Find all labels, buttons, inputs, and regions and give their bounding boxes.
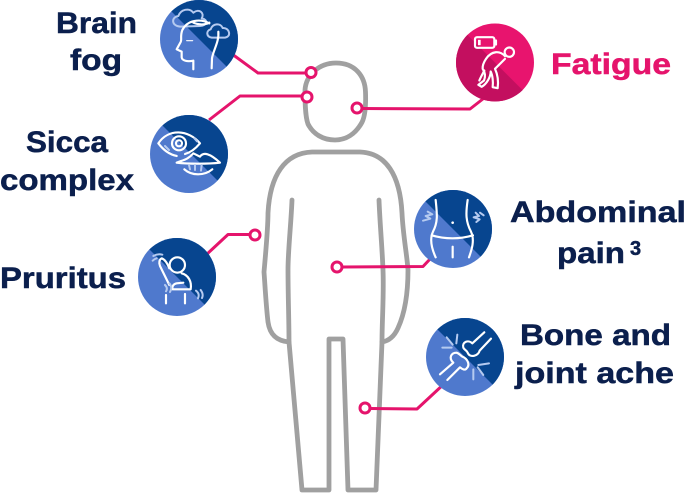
label: bone and joint ache: Bone and [520,319,671,352]
label: abdominal pain: Abdominal [510,196,685,229]
icon: pruritus [138,238,216,316]
icon: fatigue [456,24,534,102]
label: abdominal pain: 3 [630,238,641,260]
icon: sicca complex [150,115,228,193]
connector: bone and joint ache [360,383,445,413]
human body outline [264,63,408,490]
label: sicca complex: complex [0,164,134,197]
connector: sicca complex [209,92,312,120]
icon: brain fog [160,0,238,78]
label: abdominal pain: pain [557,237,625,270]
label: bone and joint ache: joint ache [514,357,674,390]
label: brain fog [56,7,137,77]
label: brain fog: Brain [56,7,137,40]
label: bone and joint ache [514,319,674,390]
label: brain fog: fog [70,44,122,77]
label: abdominal pain [510,196,685,270]
label: fatigue: Fatigue [551,48,671,81]
connector: brain fog [232,54,316,78]
label: sicca complex: Sicca [26,126,108,159]
icon: bone and joint ache [426,318,504,396]
label: pruritus: Pruritus [0,262,126,295]
connector: pruritus [206,230,260,255]
label: sicca complex [0,126,134,197]
icon: abdominal pain [414,190,492,268]
connector: fatigue [352,95,488,113]
connector: abdominal pain [332,258,431,272]
